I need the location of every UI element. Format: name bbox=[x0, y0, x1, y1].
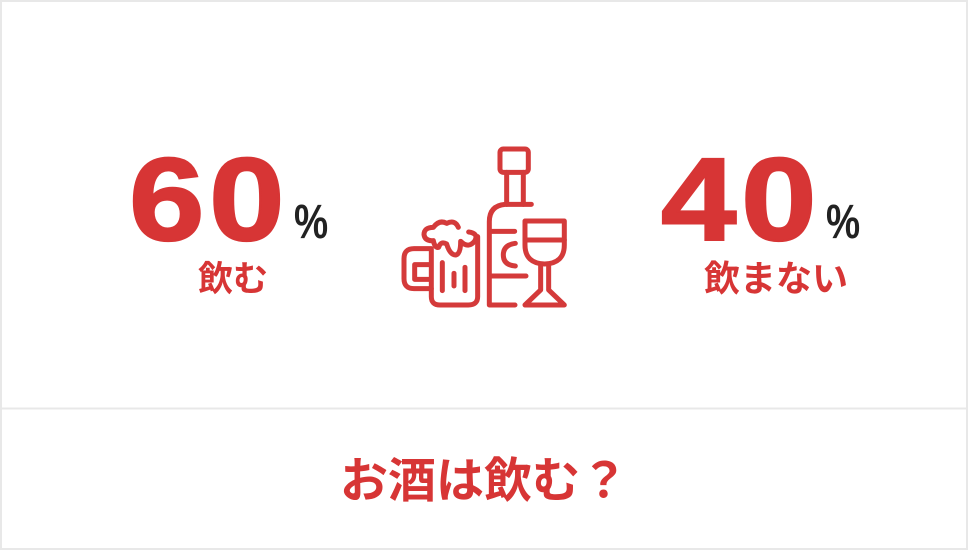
label: do not drink: 飲まない bbox=[704, 258, 848, 299]
title: お酒は飲む？ bbox=[340, 455, 628, 508]
stat: 60 percent drink bbox=[129, 133, 328, 299]
stat: 40 percent do not drink bbox=[661, 133, 860, 299]
percent sign: % bbox=[294, 196, 328, 249]
label: drink: 飲む bbox=[198, 260, 268, 299]
percent sign: % bbox=[826, 196, 860, 249]
beer mug bbox=[404, 222, 478, 305]
number: 60: 60 bbox=[129, 133, 289, 265]
icon: beer mug, bottle and wine glass bbox=[404, 149, 564, 305]
wine glass bbox=[525, 221, 564, 305]
bottle bbox=[489, 149, 531, 305]
number: 40: 40 bbox=[661, 133, 821, 265]
